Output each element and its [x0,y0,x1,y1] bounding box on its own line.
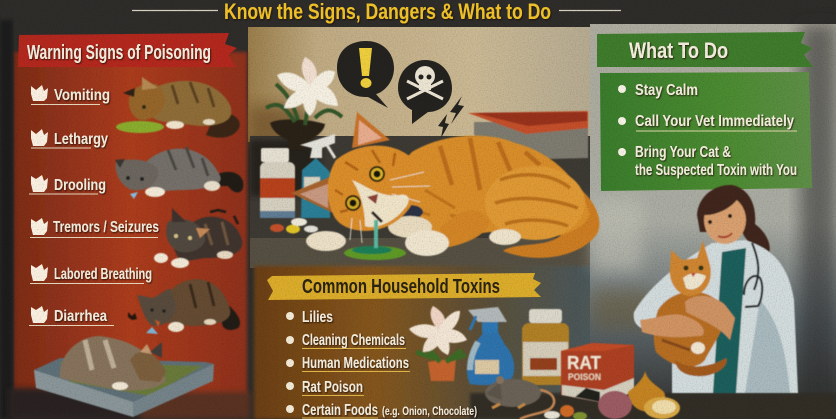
item: cleaning chemicals [286,332,406,349]
sign: tremors / seizures: Tremors / Seizures [53,219,159,236]
banner: common household toxins [267,273,541,300]
item: human medications [286,355,410,372]
drool [374,220,378,248]
body [395,136,590,240]
banner: warning signs heading: Warning Signs of Poisoning [27,42,211,64]
item: lilies: Lilies [302,309,333,326]
illustration: lethargic grey cat [115,147,243,199]
chest [388,216,432,238]
cat head [670,241,711,296]
arms [640,315,704,337]
green action panel [600,72,812,191]
illustration: medicine bottle and pills [260,148,318,234]
action: stay calm: Stay Calm [635,82,698,99]
panel: right column backdrop [470,24,836,419]
sign: vomiting [31,85,110,104]
illustration: vet holding cat [634,185,798,393]
illustration: spray bottle [300,134,335,218]
illustration: potted lily [409,306,467,381]
label: RAT [567,353,601,373]
item: rat poison [286,379,364,396]
panel: what to do [597,32,813,191]
banner: common household toxins: Common Household Toxins [302,276,500,298]
illustration: vomiting cat [116,77,240,138]
sign: lethargy [31,129,108,148]
illustration: labored breathing cat [128,279,240,334]
action: stay calm [618,82,698,99]
puddle [344,246,406,260]
nose and mouth [367,194,378,204]
illustration: medicine jar [522,309,569,385]
tail [503,182,599,258]
collar [397,205,423,219]
title rule right [559,10,621,12]
sign: labored breathing [30,264,152,284]
hair [697,185,770,253]
sign: vomiting: Vomiting [54,87,110,104]
item: certain foods: (e.g. Onion, Chocolate) [382,406,477,418]
coat [634,240,798,393]
icon: warning speech bubble [337,41,394,108]
panel: centre wall scene backdrop [248,27,596,268]
sign: diarrhea [29,306,114,326]
sign: drooling [29,175,106,194]
paws [306,231,346,251]
action: bring your cat [618,144,797,179]
illustration: red litter tray [468,111,588,160]
illustration: cat in litter box [34,336,214,417]
banner: warning signs heading [18,33,237,67]
item: cleaning chemicals: Cleaning Chemicals [302,332,405,349]
illustration: lily in vase [266,57,342,150]
item: certain foods [286,402,477,419]
illustration: rat [485,376,587,419]
sign: labored breathing: Labored Breathing [54,266,152,283]
label: POISON [568,372,601,382]
icon: skull speech bubble [398,60,452,124]
title rule left [132,10,218,12]
sign: diarrhea: Diarrhea [54,308,107,325]
haunch [485,166,585,240]
head [328,146,419,231]
cat body [654,292,725,367]
icon: lightning bolts [438,96,464,138]
eyes [369,166,385,182]
whiskers [350,172,430,243]
sign: drooling: Drooling [54,177,106,194]
item: rat poison: Rat Poison [302,379,363,396]
panel: toxins backdrop [254,266,599,419]
action: bring your cat: Bring Your Cat & [635,144,731,161]
list: toxins [286,309,477,419]
banner: what to do heading [597,32,813,67]
panel: warning signs [0,20,250,419]
illustration: seizing cat [154,208,242,268]
stethoscope [744,243,762,307]
banner: what to do heading: What To Do [629,38,728,63]
sign: tremors / seizures [30,218,159,238]
item: lilies [286,309,333,326]
illustration: sick orange cat [291,112,599,260]
sign: lethargy: Lethargy [54,131,108,148]
scrubs [713,248,746,393]
face [704,196,746,244]
item: certain foods: Certain Foods [302,402,378,419]
action: call your vet: Call Your Vet Immediately [635,113,794,130]
illustration: blue cleaning bottle [467,307,514,385]
ears [352,112,390,148]
illustration: onions [598,371,680,419]
illustration: rat poison box [561,343,634,403]
item: human medications: Human Medications [302,355,409,372]
